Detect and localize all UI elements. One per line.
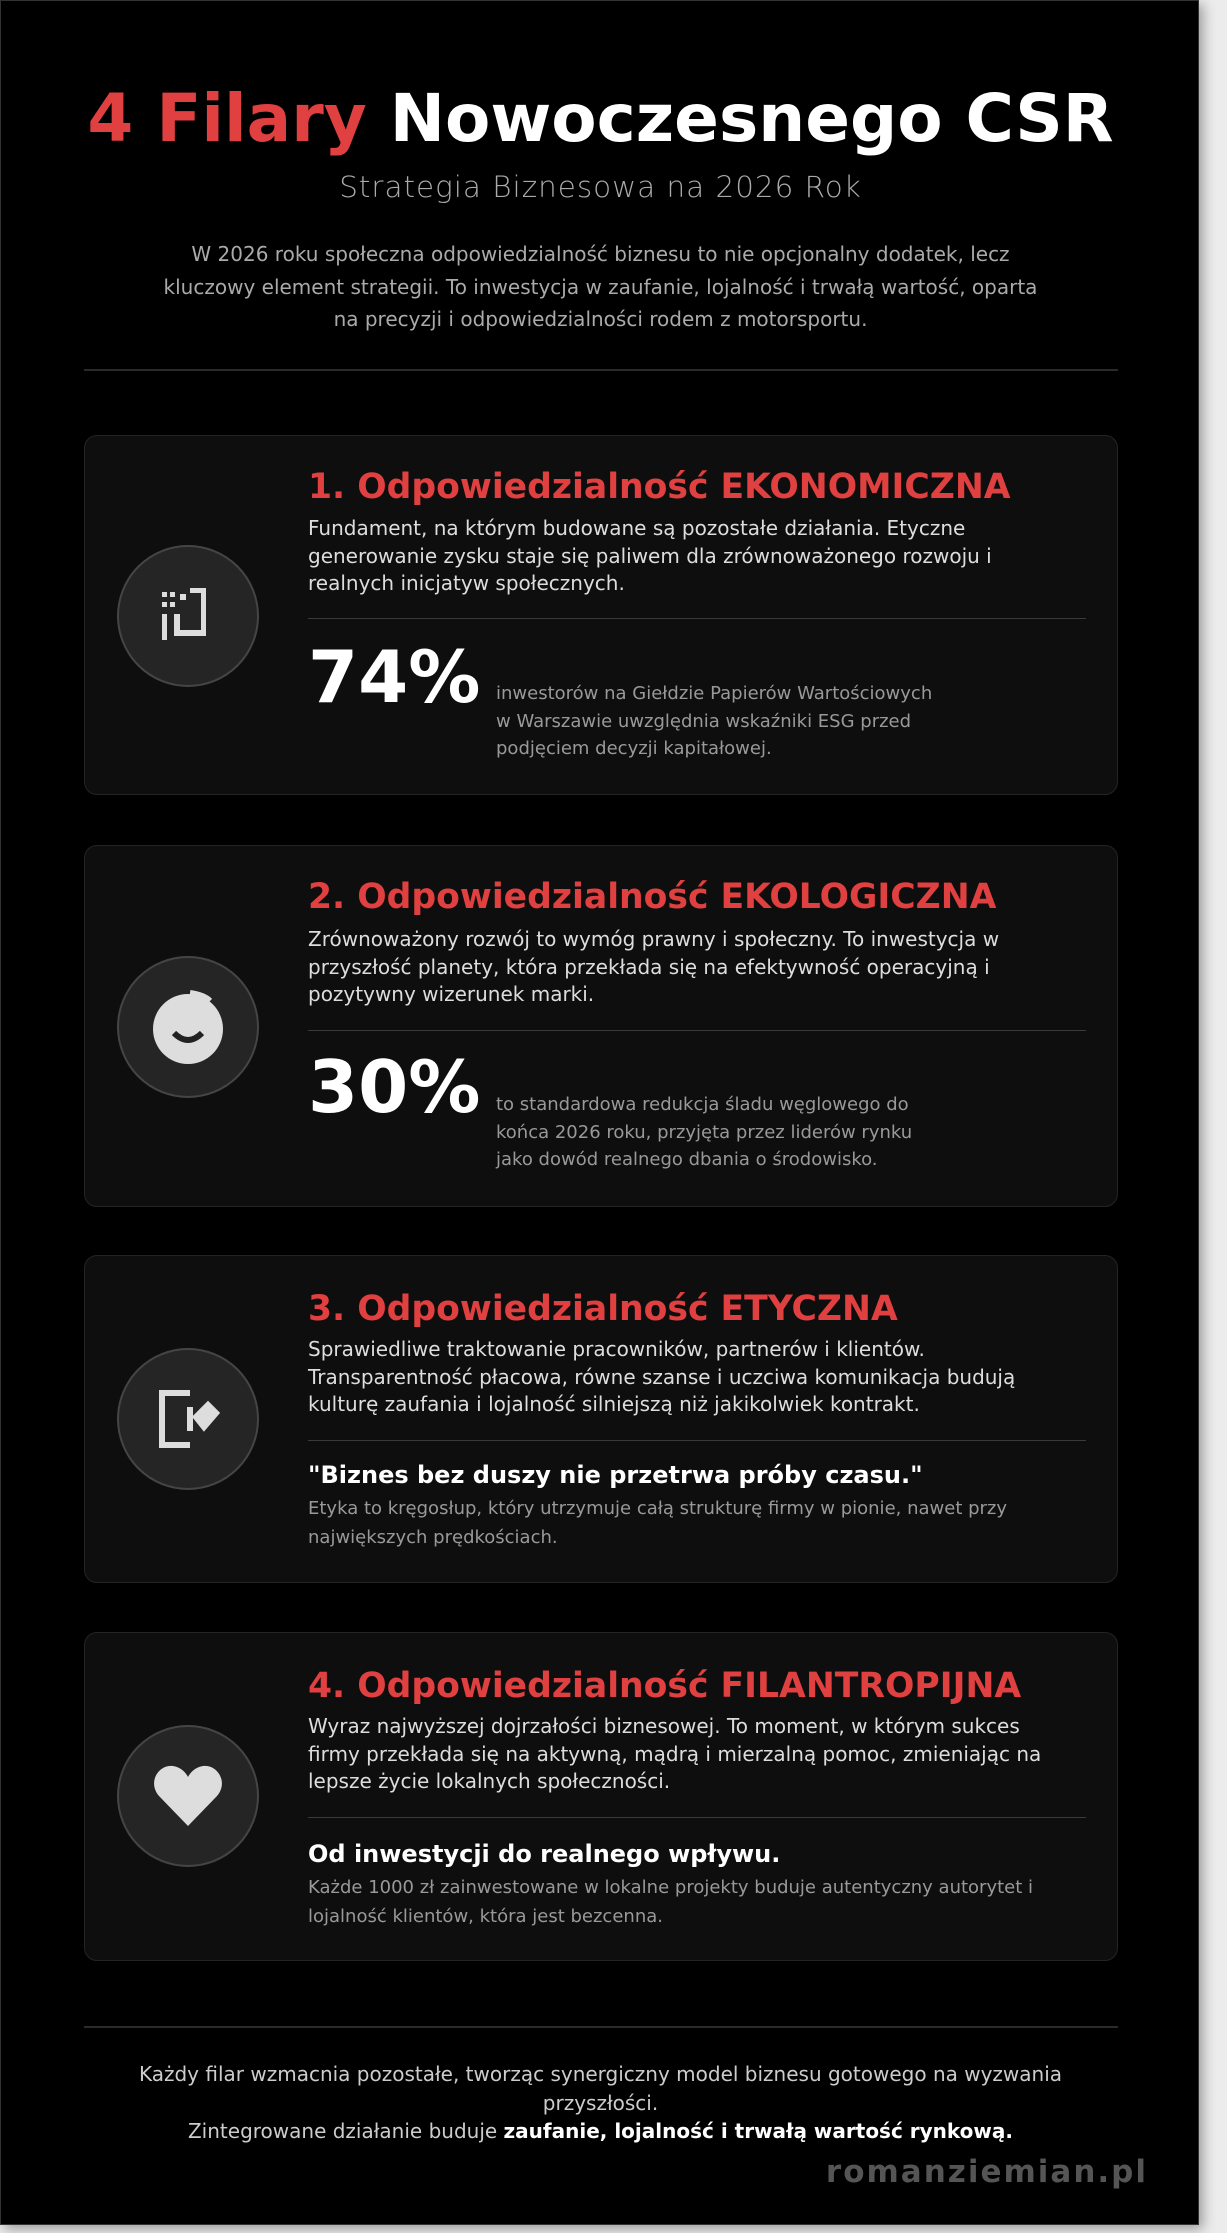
footer text: przyszłości. bbox=[543, 2090, 658, 2114]
stat: 30%: 30% bbox=[308, 1045, 480, 1129]
body: generowanie zysku staje się paliwem dla zrównoważonego rozwoju i bbox=[308, 544, 992, 568]
body bbox=[308, 516, 992, 595]
footer text: Każdy filar wzmacnia pozostałe, tworząc synergiczny model biznesu gotowego na wyzwania bbox=[139, 2062, 1062, 2086]
callout sub: lojalność klientów, która jest bezcenna. bbox=[308, 1906, 663, 1927]
stat text: to standardowa redukcja śladu węglowego do bbox=[496, 1094, 909, 1115]
body: kulturę zaufania i lojalność silniejszą niż jakikolwiek kontrakt. bbox=[308, 1392, 920, 1416]
callout: Od inwestycji do realnego wpływu. bbox=[308, 1840, 780, 1868]
panel: philanthropic bbox=[84, 1632, 1118, 1961]
callout sub: Każde 1000 zł zainwestowane w lokalne projekty buduje autentyczny autorytet i bbox=[308, 1877, 1033, 1898]
stat text: jako dowód realnego dbania o środowisko. bbox=[496, 1149, 878, 1170]
stat text: końca 2026 roku, przyjęta przez liderów rynku bbox=[496, 1122, 912, 1142]
intro text: na precyzji i odpowiedzialności rodem z motorsportu. bbox=[334, 307, 867, 331]
stat text bbox=[496, 683, 932, 759]
body: Zrównoważony rozwój to wymóg prawny i społeczny. To inwestycja w bbox=[308, 927, 999, 951]
body: Transparentność płacowa, równe szanse i uczciwa komunikacja budują bbox=[308, 1365, 1015, 1389]
intro text: W 2026 roku społeczna odpowiedzialność biznesu to nie opcjonalny dodatek, lecz bbox=[191, 242, 1010, 266]
quote: "Biznes bez duszy nie przetrwa próby czasu." bbox=[308, 1461, 923, 1489]
body: Fundament, na którym budowane są pozostałe działania. Etyczne bbox=[308, 516, 965, 540]
body bbox=[308, 927, 999, 1006]
icon: globe bbox=[117, 956, 259, 1098]
callout sub bbox=[308, 1877, 1033, 1927]
title: 4 Filary Nowoczesnego CSR bbox=[87, 80, 1114, 157]
footer text bbox=[139, 2062, 1062, 2143]
footer text: Zintegrowane działanie buduje zaufanie, lojalność i trwałą wartość rynkową. bbox=[188, 2119, 1013, 2143]
stat text bbox=[496, 1094, 912, 1170]
heading: 3. Odpowiedzialność ETYCZNA bbox=[308, 1289, 898, 1329]
stat text: w Warszawie uwzględnia wskaźniki ESG przed bbox=[496, 710, 911, 732]
panel: ecological bbox=[84, 845, 1118, 1207]
body bbox=[308, 1714, 1041, 1793]
quote sub bbox=[308, 1498, 1007, 1548]
quote sub: największych prędkościach. bbox=[308, 1527, 558, 1548]
heading: 2. Odpowiedzialność EKOLOGICZNA bbox=[308, 877, 996, 917]
body: Wyraz najwyższej dojrzałości biznesowej. To moment, w którym sukces bbox=[308, 1714, 1020, 1738]
quote sub: Etyka to kręgosłup, który utrzymuje całą strukturę firmy w pionie, nawet przy bbox=[308, 1498, 1007, 1519]
intro text bbox=[164, 242, 1037, 331]
icon: heart bbox=[117, 1725, 259, 1867]
panel: ethical bbox=[84, 1255, 1118, 1583]
stat text: inwestorów na Giełdzie Papierów Wartościowych bbox=[496, 683, 932, 704]
body bbox=[308, 1337, 1015, 1416]
watermark: romanziemian.pl bbox=[826, 2154, 1148, 2190]
body: przyszłość planety, która przekłada się na efektywność operacyjną i bbox=[308, 955, 990, 979]
panel: economic bbox=[84, 435, 1118, 795]
body: pozytywny wizerunek marki. bbox=[308, 982, 594, 1006]
body: lepsze życie lokalnych społeczności. bbox=[308, 1769, 670, 1793]
stat text: podjęciem decyzji kapitałowej. bbox=[496, 738, 772, 759]
icon: economic bbox=[117, 545, 259, 687]
intro text: kluczowy element strategii. To inwestycja w zaufanie, lojalność i trwałą wartość, oparta bbox=[164, 274, 1037, 298]
stat: 74%: 74% bbox=[308, 635, 480, 719]
body: firmy przekłada się na aktywną, mądrą i mierzalną pomoc, zmieniając na bbox=[308, 1742, 1041, 1766]
subtitle: Strategia Biznesowa na 2026 Rok bbox=[339, 170, 862, 204]
body: Sprawiedliwe traktowanie pracowników, partnerów i klientów. bbox=[308, 1337, 925, 1361]
body: realnych inicjatyw społecznych. bbox=[308, 571, 625, 595]
icon: document bbox=[117, 1348, 259, 1490]
heading: 1. Odpowiedzialność EKONOMICZNA bbox=[308, 467, 1011, 507]
heading: 4. Odpowiedzialność FILANTROPIJNA bbox=[308, 1666, 1021, 1706]
